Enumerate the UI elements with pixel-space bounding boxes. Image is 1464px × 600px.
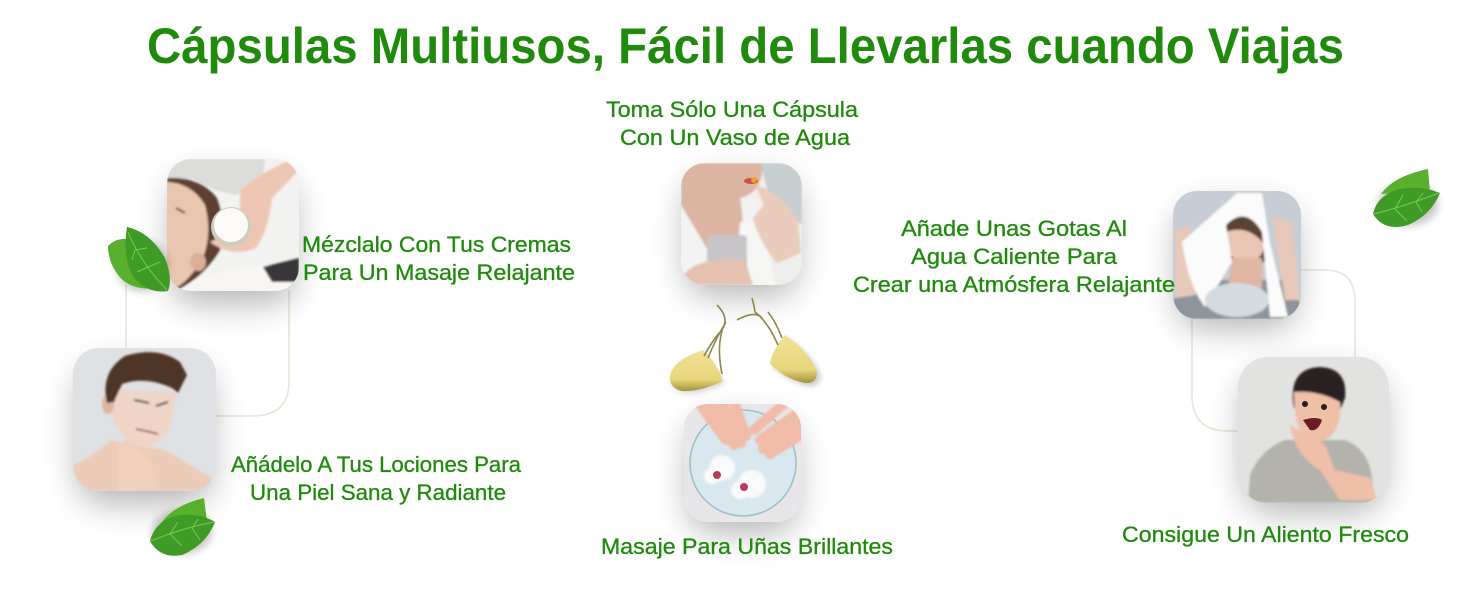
label: creams massage xyxy=(302,232,575,285)
photo: steam with towel xyxy=(1173,191,1301,328)
label: one capsule with water: Toma Sólo Una Cápsula xyxy=(606,97,859,122)
leaf: left lower xyxy=(150,498,215,556)
photo: man with fresh breath xyxy=(1238,357,1389,512)
photo: taking a capsule xyxy=(681,163,802,295)
label: one capsule with water xyxy=(606,97,859,150)
label: creams massage: Para Un Masaje Relajante xyxy=(303,260,575,285)
label: lotions: Añádelo A Tus Lociones Para xyxy=(231,452,522,477)
photo: massage with cream xyxy=(160,159,299,303)
title: Cápsulas Multiusos, Fácil de Llevarlas cuando Viajas xyxy=(147,18,1344,74)
label: lotions xyxy=(231,452,522,505)
label: hot water drops: Crear una Atmósfera Relajante xyxy=(853,272,1175,297)
leaf: left upper xyxy=(108,227,170,292)
photo: man touching face xyxy=(73,348,216,503)
label: hot water drops: Añade Unas Gotas Al xyxy=(901,216,1127,241)
label: hot water drops xyxy=(853,216,1175,297)
label: creams massage: Mézclalo Con Tus Cremas xyxy=(302,232,571,257)
connector lines right xyxy=(1192,270,1355,431)
capsule left xyxy=(670,305,726,393)
photo: nails in bowl xyxy=(684,402,806,532)
capsule right xyxy=(737,298,821,386)
connector lines left xyxy=(126,285,289,416)
label: one capsule with water: Con Un Vaso de Agua xyxy=(620,125,851,150)
label: hot water drops: Agua Caliente Para xyxy=(911,244,1118,269)
leaf: right top xyxy=(1373,169,1440,227)
label: fresh breath: Consigue Un Aliento Fresco xyxy=(1122,522,1409,547)
label: nails: Masaje Para Uñas Brillantes xyxy=(601,534,893,559)
label: lotions: Una Piel Sana y Radiante xyxy=(250,480,506,505)
